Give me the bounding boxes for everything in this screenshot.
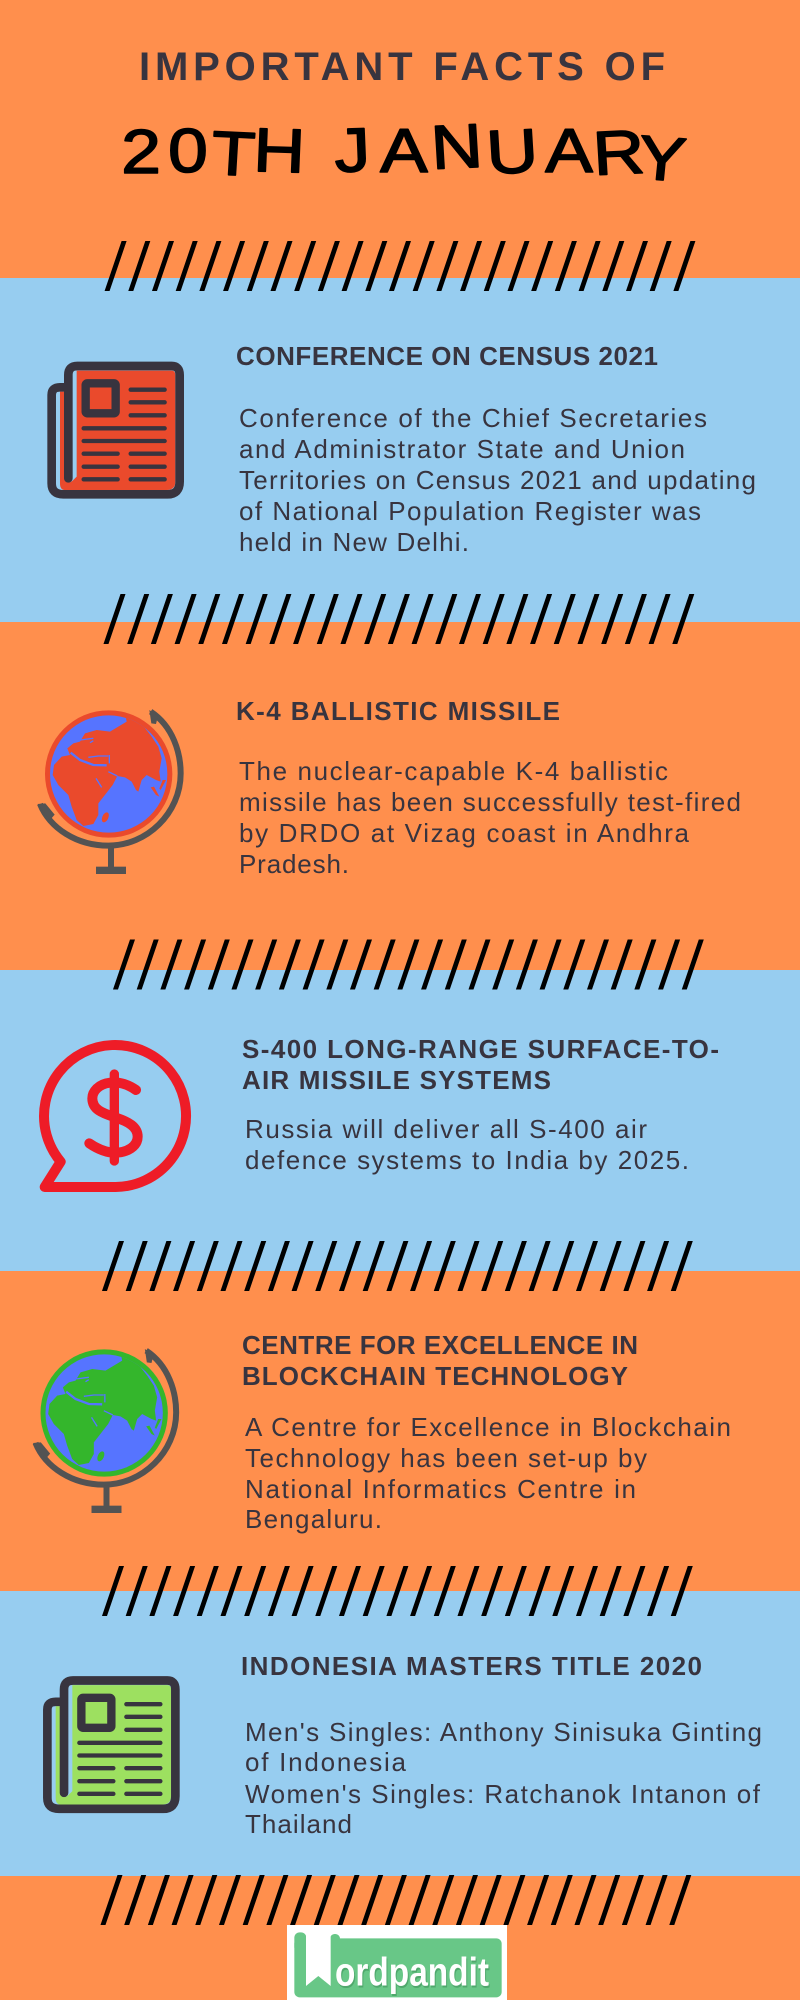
- body text: by DRDO at Vizag coast in Andhra: [239, 818, 690, 848]
- body text: Russia will deliver all S-400 air: [245, 1114, 647, 1144]
- body text: defence systems to India by 2025.: [245, 1145, 689, 1175]
- icon: red newspaper: [52, 366, 180, 494]
- heading: [242, 1330, 638, 1391]
- body text: Bengaluru.: [245, 1504, 382, 1534]
- panel: footer: [0, 1876, 800, 2000]
- body text: [245, 1412, 731, 1534]
- heading: S-400 LONG-RANGE SURFACE-TO-: [242, 1034, 719, 1064]
- body text: of National Population Register was: [239, 496, 701, 526]
- body text: [245, 1717, 762, 1839]
- heading: CONFERENCE ON CENSUS 2021: [236, 341, 658, 371]
- panel: k-4 ballistic missile: [37, 702, 740, 874]
- divider: hatch 3: [121, 940, 695, 990]
- panel: conference on census 2021: [0, 278, 800, 622]
- body text: Conference of the Chief Secretaries: [239, 403, 707, 433]
- heading: important facts of: IMPORTANT FACTS OF: [139, 45, 665, 89]
- divider: hatch 4: [110, 1241, 684, 1291]
- body text: Women's Singles: Ratchanok Intanon of: [245, 1779, 761, 1809]
- body text: National Informatics Centre in: [245, 1474, 636, 1504]
- heading: CENTRE FOR EXCELLENCE IN: [242, 1330, 638, 1360]
- icon: dollar speech bubble: [44, 1045, 186, 1187]
- panel: centre for excellence in blockchain: [32, 1336, 730, 1534]
- body text: and Administrator State and Union: [239, 434, 685, 464]
- heading: BLOCKCHAIN TECHNOLOGY: [242, 1361, 628, 1391]
- panel: header: [0, 0, 800, 278]
- body text: [239, 756, 741, 879]
- body text: missile has been successfully test-fired: [239, 787, 741, 817]
- logo wordmark: ordpandit: [335, 1950, 489, 1994]
- panel: indonesia masters title 2020: [0, 1591, 800, 1876]
- heading: K-4 BALLISTIC MISSILE: [236, 696, 560, 726]
- body text: of Indonesia: [245, 1747, 407, 1777]
- logo: wordpandit: [287, 1925, 507, 2000]
- title: 20th January: 20TH JANUARY: [121, 112, 689, 195]
- heading: [242, 1034, 719, 1095]
- divider: hatch 2: [112, 594, 686, 644]
- divider: hatch 5: [110, 1566, 684, 1616]
- body text: Technology has been set-up by: [245, 1443, 647, 1473]
- body text: A Centre for Excellence in Blockchain: [245, 1412, 731, 1442]
- body text: Men's Singles: Anthony Sinisuka Ginting: [245, 1717, 762, 1747]
- body text: [239, 403, 756, 557]
- body text: Pradesh.: [239, 849, 349, 879]
- icon: green globe: [33, 1349, 176, 1513]
- divider: hatch 6: [109, 1875, 683, 1925]
- panel: s-400 missile systems: [0, 970, 800, 1271]
- divider: hatch 1: [113, 241, 687, 291]
- body text: [245, 1114, 689, 1175]
- icon: green newspaper: [47, 1680, 175, 1809]
- body text: Thailand: [245, 1809, 352, 1839]
- body text: held in New Delhi.: [239, 527, 469, 557]
- icon: red globe: [37, 710, 181, 874]
- heading: INDONESIA MASTERS TITLE 2020: [241, 1651, 702, 1681]
- body text: The nuclear-capable K-4 ballistic: [239, 756, 668, 786]
- body text: Territories on Census 2021 and updating: [239, 465, 756, 495]
- heading: AIR MISSILE SYSTEMS: [242, 1065, 551, 1095]
